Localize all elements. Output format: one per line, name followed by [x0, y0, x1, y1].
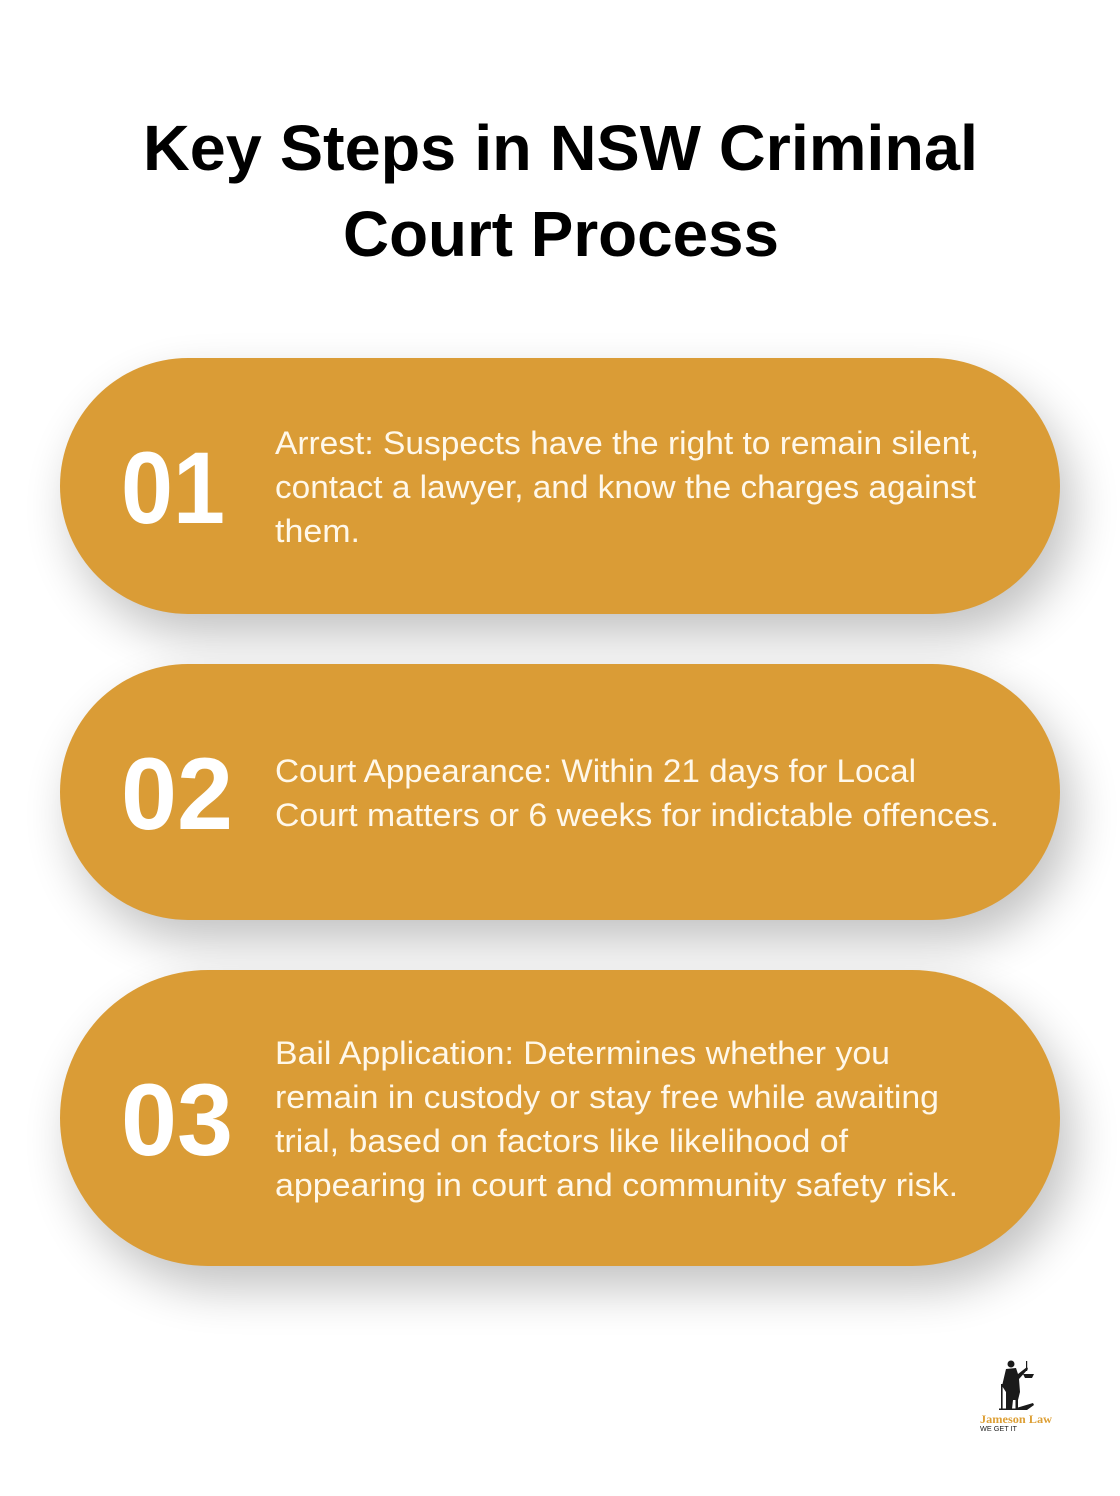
title: Key Steps in NSW Criminal	[143, 112, 978, 184]
step number 02: 02	[121, 737, 233, 851]
panel: step 01 arrest	[60, 358, 1072, 636]
step text: court appearance	[275, 753, 999, 833]
step text: bail application: remain in custody or stay free while awaiting	[275, 1079, 939, 1115]
step text: arrest: them.	[275, 513, 360, 549]
step text: bail application	[275, 1035, 958, 1203]
step text: arrest: contact a lawyer, and know the charges against	[275, 469, 976, 505]
step text: arrest	[275, 425, 979, 549]
step number 01: 01	[121, 431, 225, 545]
logo tagline: WE GET IT	[980, 1426, 1018, 1433]
logo name: Jameson Law	[980, 1414, 1053, 1426]
step text: bail application: trial, based on factors like likelihood of	[275, 1123, 848, 1159]
title: Court Process	[343, 198, 779, 270]
title	[143, 112, 978, 270]
step text: court appearance: Court Appearance: Within 21 days for Local	[275, 753, 916, 789]
step text: court appearance: Court matters or 6 weeks for indictable offences.	[275, 797, 999, 833]
step text: arrest: Arrest: Suspects have the right to remain silent,	[275, 425, 979, 461]
step number 03: 03	[121, 1063, 233, 1177]
panel: step 03 bail application	[60, 970, 1072, 1288]
icon: lady justice	[999, 1360, 1034, 1410]
logo: Jameson Law	[980, 1360, 1053, 1433]
step text: bail application: Bail Application: Determines whether you	[275, 1035, 890, 1071]
step text: bail application: appearing in court and community safety risk.	[275, 1167, 958, 1203]
panel: step 02 court appearance	[60, 664, 1072, 942]
